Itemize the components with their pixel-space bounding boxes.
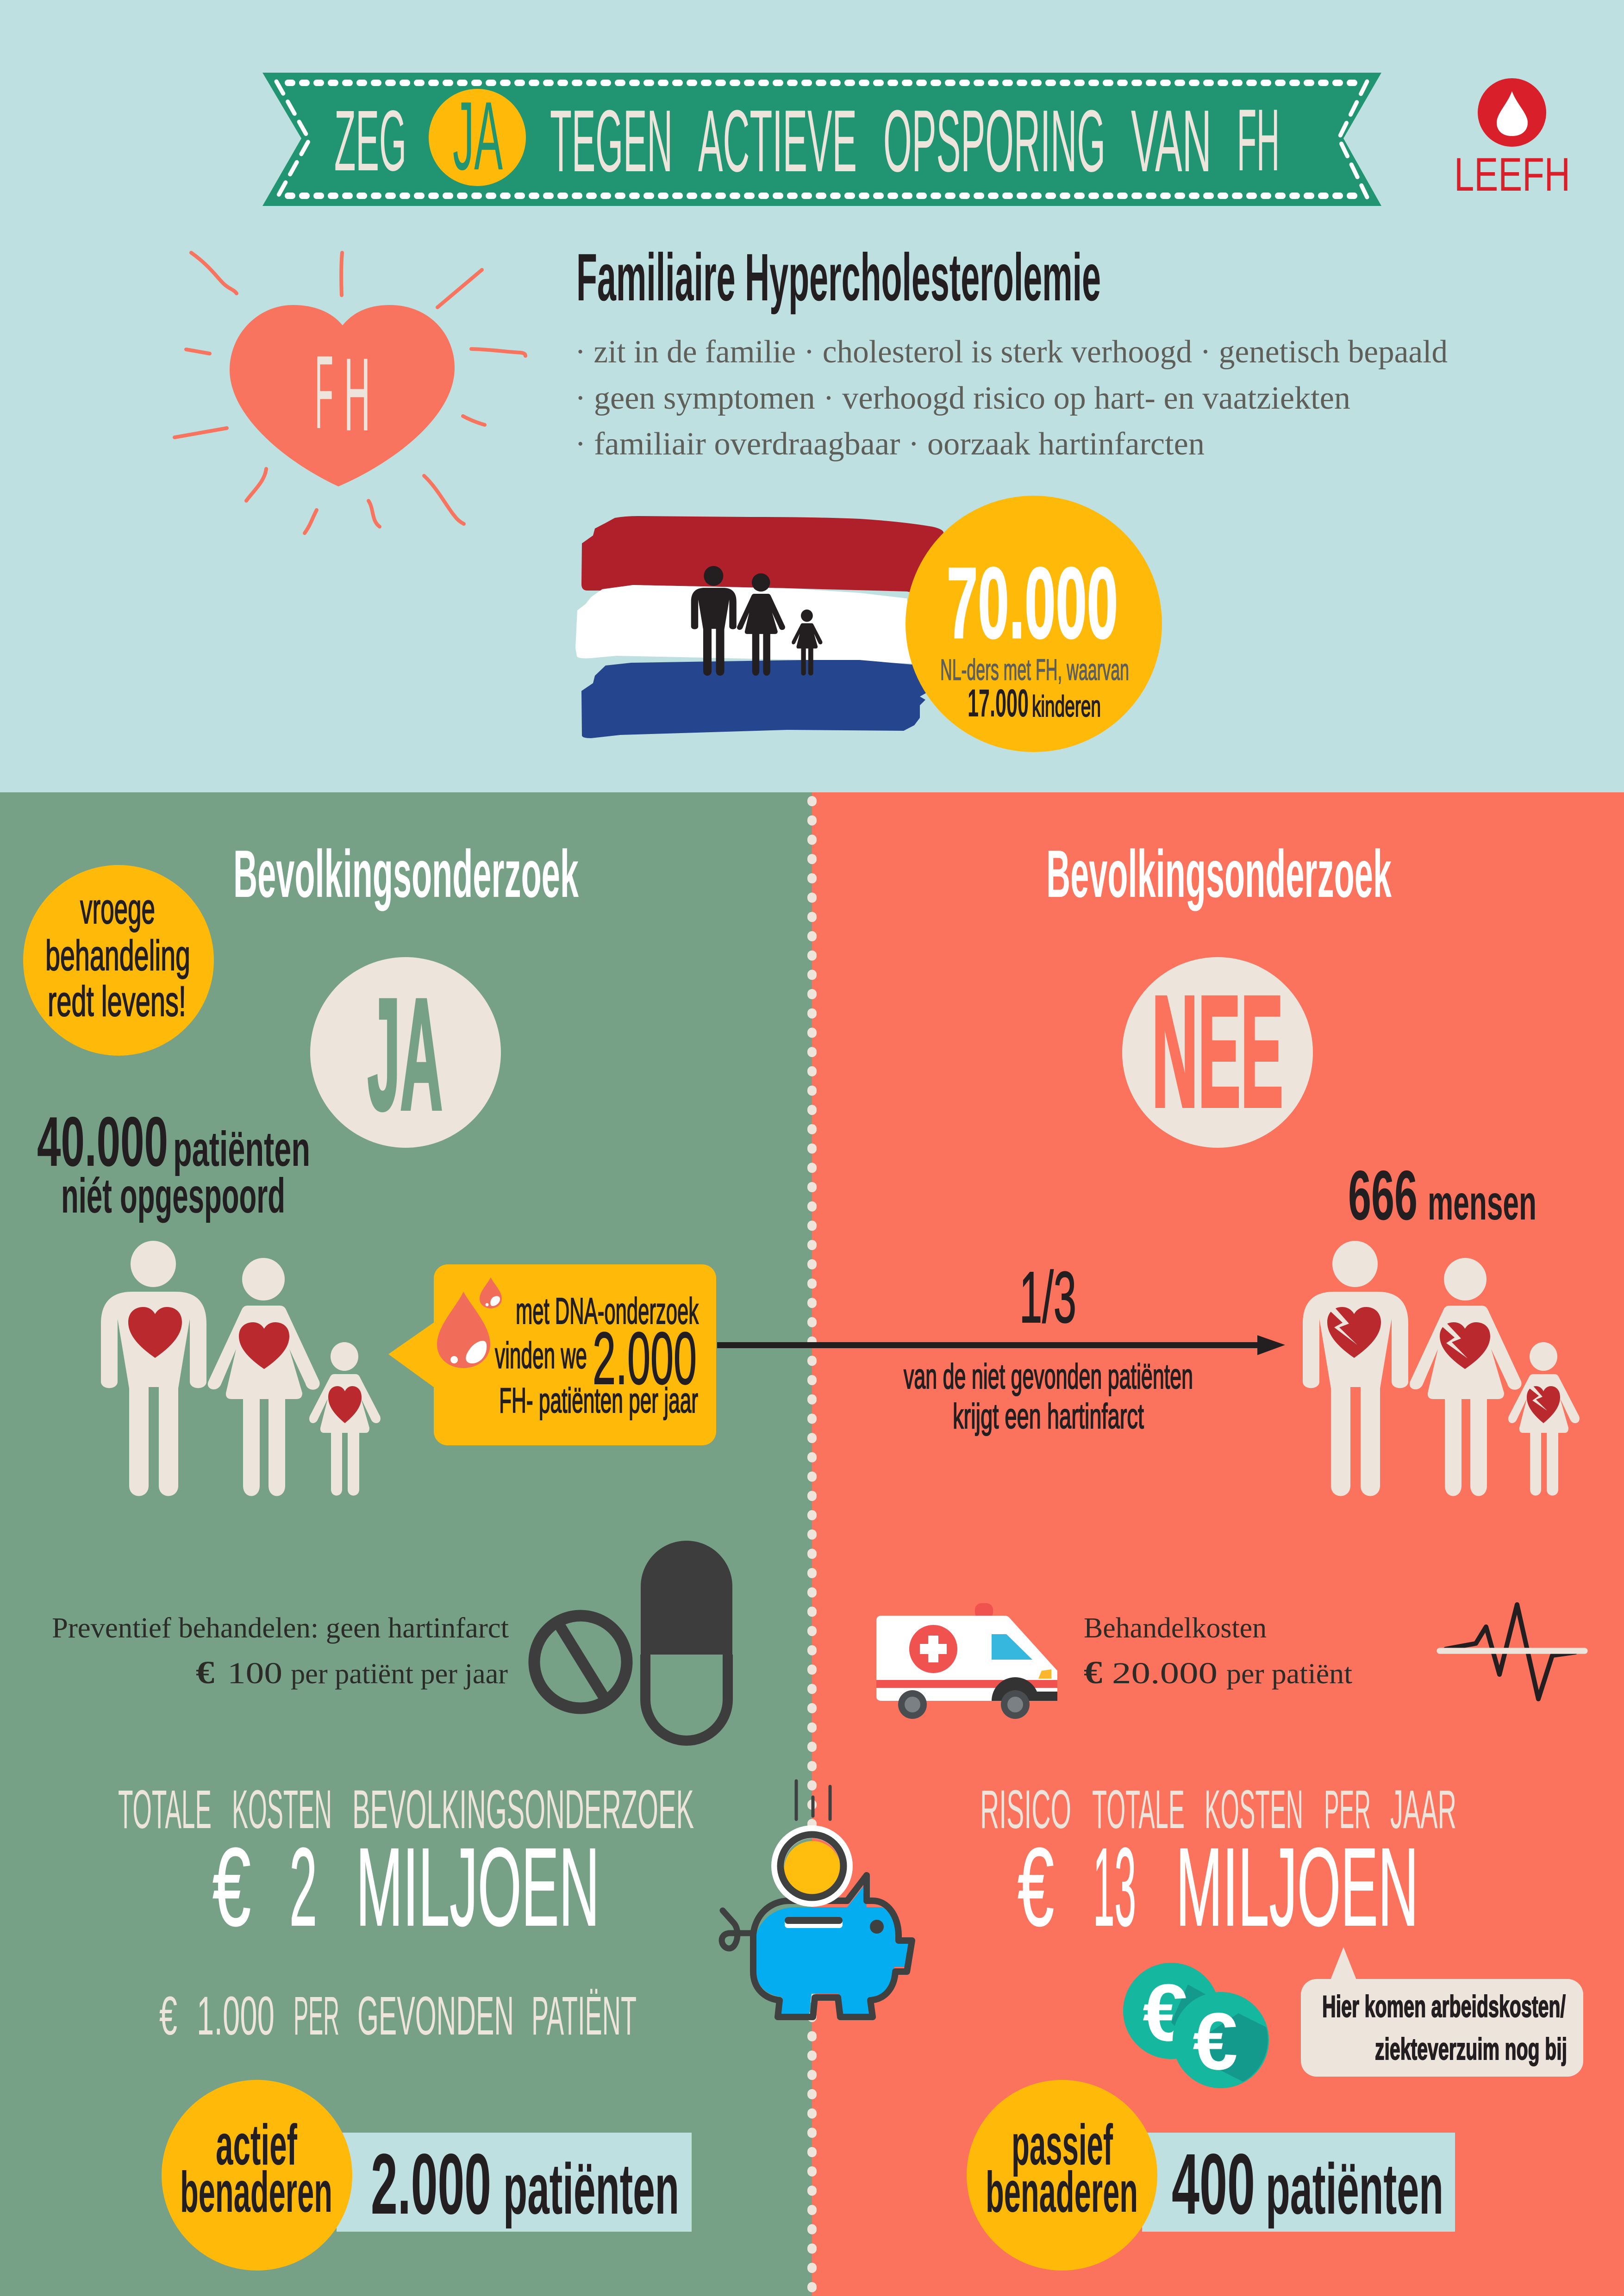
arrow: to family with heart attacks [717,1335,1285,1355]
panel: NEE side background [812,792,1624,2296]
heading: totale kosten bevolkingsonderzoek: KOSTEN [232,1779,332,1840]
stat circle: 70.000 [906,496,1162,752]
icon: euro coins: € [1143,1968,1188,2058]
result bar: passief benaderen: 400 [1172,2136,1255,2232]
stat circle: 70.000: kinderen [1032,690,1101,723]
text block: FH characteristics [575,334,1448,462]
infographic canvas: NEE [1152,963,1283,1140]
callout circle: vroege behandeling: vroege [80,885,155,933]
icon: FH heart with rays: F [315,334,333,450]
result bar: passief benaderen: benaderen [986,2160,1138,2224]
family: broken hearts [1303,1241,1580,1496]
badge: NEE [1122,957,1313,1148]
icon: ambulance [876,1603,1057,1719]
text block: preventief behandelen [52,1612,509,1691]
badge: JA: JA [368,966,443,1143]
figure: 2 miljoen [212,1825,600,1949]
stat circle: 70.000: NL-ders met FH, waarvan [940,653,1129,686]
text: 1/3: 1/3 [1019,1257,1076,1338]
infographic canvas: Bevolkingsonderzoek [233,836,579,911]
speech callout: DNA-onderzoek: vinden we [495,1335,587,1376]
result bar: actief benaderen: actief [216,2113,297,2177]
text block: preventief behandelen: € [196,1655,214,1691]
figure: 13 miljoen: € [1018,1825,1054,1949]
heading: risico totale kosten: TOTALE [1092,1779,1185,1840]
heading: totale kosten bevolkingsonderzoek: TOTALE [118,1779,212,1840]
stat: 40.000 patienten niet opgespoord: niét opgespoord [61,1169,285,1223]
icon: FH heart with rays: H [344,336,370,453]
logo: LEEFH [1454,78,1570,201]
text: van de niet gevonden patienten [904,1357,1193,1436]
banner: title ribbon: OPSPORING [883,92,1106,190]
badge: JA [429,81,526,190]
heading: totale kosten bevolkingsonderzoek [118,1779,694,1840]
text: 1.000 per gevonden patient: PER [294,1985,339,2047]
panel: intro background [0,0,1624,792]
icon: euro coins: € [1193,1997,1238,2087]
heading: risico totale kosten: PER [1324,1779,1371,1840]
heading: Familiaire Hypercholesterolemie: Familiaire Hypercholesterolemie [576,240,1101,315]
text: 1.000 per gevonden patient [159,1985,637,2047]
infographic canvas: BEVOLKINGSONDERZOEK [352,1779,694,1840]
text: 1.000 per gevonden patient: 1.000 [197,1985,275,2047]
speech callout: DNA-onderzoek: FH- patiënten per jaar [499,1381,698,1420]
speech bubble: arbeidskosten [1301,1947,1583,2077]
banner: title ribbon: ZEG [334,93,406,189]
icon: blood drops [437,1277,502,1368]
text block: FH characteristics: · geen symptomen · verhoogd risico op hart- en vaatziekten [575,380,1350,416]
figure: 2 miljoen: MILJOEN [356,1825,600,1949]
text block: FH characteristics: · zit in de familie · cholesterol is sterk verhoogd · genetisch bepaald [575,334,1448,370]
stat circle: 70.000: 17.000 [968,681,1029,725]
text block: preventief behandelen: per patiënt per jaar [291,1658,508,1690]
text block: FH characteristics: · familiair overdraagbaar · oorzaak hartinfarcten [575,426,1205,462]
text block: preventief behandelen: Preventief behandelen: geen hartinfarct [52,1612,509,1644]
badge: JA: JA [453,81,503,190]
banner: title ribbon: ACTIEVE [698,92,857,190]
banner: title ribbon: TEGEN [550,92,673,190]
text block: behandelkosten: per patiënt [1226,1658,1352,1690]
infographic canvas: JAAR [1390,1779,1456,1840]
icon: heartbeat line [1440,1605,1585,1699]
family: healthy hearts [101,1241,381,1496]
callout circle: vroege behandeling: redt levens! [48,978,186,1025]
result bar: passief benaderen: patiënten [1266,2149,1443,2229]
result bar: passief benaderen: passief [1012,2113,1113,2177]
heading: risico totale kosten [980,1779,1456,1840]
stat: 40.000 patienten niet opgespoord [37,1102,310,1223]
banner: title ribbon [262,73,1381,206]
result bar: actief benaderen [162,2080,692,2271]
stat: 40.000 patienten niet opgespoord: 40.000 [37,1102,168,1181]
stat: 40.000 patienten niet opgespoord: patiënten [173,1122,310,1176]
banner: title ribbon: VAN [1131,92,1212,190]
stat: 666 mensen [1348,1156,1537,1235]
flag: Dutch brush stripes with family [575,516,954,738]
speech callout: DNA-onderzoek: 2.000 [593,1317,697,1400]
heading: risico totale kosten: RISICO [980,1779,1071,1840]
text: 1.000 per gevonden patient: € [159,1985,177,2047]
text: van de niet gevonden patienten: krijgt een hartinfarct [953,1397,1144,1436]
text block: preventief behandelen: 100 [227,1656,282,1690]
text block: behandelkosten [1084,1612,1352,1691]
result bar: actief benaderen: patiënten [503,2149,679,2229]
figure: 2 miljoen: 2 [289,1825,317,1949]
logo: LEEFH: LEEFH [1454,148,1570,201]
text block: behandelkosten: Behandelkosten [1084,1612,1267,1644]
icon: pills [534,1541,732,1741]
callout circle: vroege behandeling: behandeling [45,932,190,979]
text: van de niet gevonden patienten: van de niet gevonden patiënten [904,1357,1193,1396]
icon: euro coins [1123,1963,1269,2088]
speech callout: DNA-onderzoek: met DNA-onderzoek [516,1290,699,1332]
badge: JA [310,957,501,1148]
figure: 13 miljoen [1018,1825,1418,1949]
heading: risico totale kosten: KOSTEN [1205,1779,1303,1840]
infographic canvas: PATIËNT [531,1985,637,2047]
text: 1.000 per gevonden patient: GEVONDEN [357,1985,514,2047]
figure: 2 miljoen: € [212,1825,251,1949]
stat: 666 mensen: 666 [1348,1156,1418,1235]
panel: JA side background [0,792,812,2296]
text block: behandelkosten: 20.000 [1112,1656,1218,1690]
icon: piggy bank with coin [722,1781,912,2017]
callout circle: vroege behandeling [23,865,214,1056]
stat: 666 mensen: mensen [1428,1176,1537,1230]
figure: 13 miljoen: 13 [1093,1825,1136,1949]
result bar: actief benaderen: benaderen [180,2160,332,2224]
result bar: passief benaderen [967,2080,1455,2271]
stat circle: 70.000: 70.000 [947,547,1118,660]
result bar: actief benaderen: 2.000 [371,2136,491,2232]
icon: FH heart with rays [175,253,525,533]
text block: behandelkosten: € [1084,1655,1102,1691]
banner: title ribbon: FH [1237,91,1280,189]
speech callout: DNA-onderzoek [388,1264,716,1445]
